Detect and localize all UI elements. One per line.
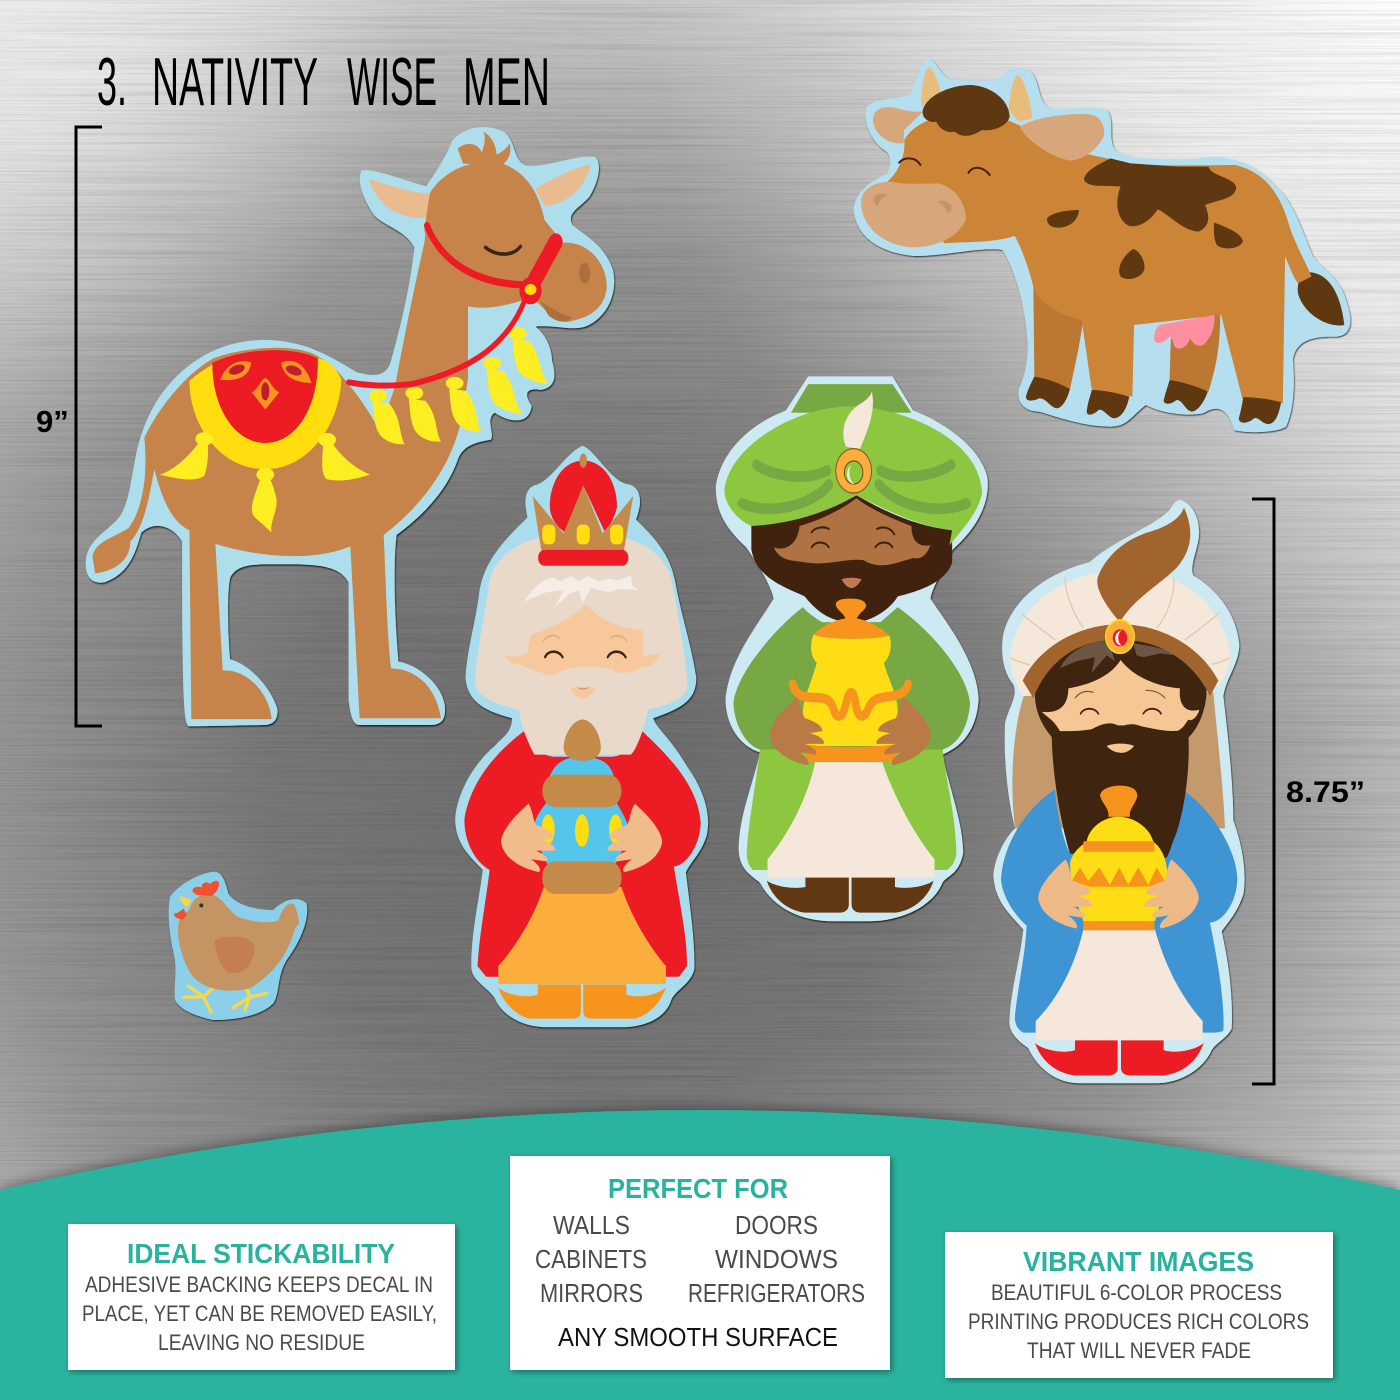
surfaces list: WALLS xyxy=(553,1210,630,1240)
card body text: PLACE, YET CAN BE REMOVED EASILY, xyxy=(82,1301,437,1326)
card heading: PERFECT FOR xyxy=(608,1173,788,1204)
red king hands xyxy=(501,804,662,872)
blue king magnet xyxy=(993,500,1245,1083)
tan head cloth xyxy=(1012,692,1225,828)
red king mouth xyxy=(571,687,596,699)
camel eye xyxy=(485,246,521,254)
teal curved band xyxy=(0,1110,1400,1400)
red robe xyxy=(464,731,701,977)
cow right ear xyxy=(1020,114,1104,161)
golden urn xyxy=(1100,786,1137,817)
blue king face xyxy=(1042,660,1199,731)
turban plume xyxy=(1097,508,1190,622)
title: NATIVITY xyxy=(152,44,318,120)
orange gown xyxy=(498,887,666,984)
card body text: THAT WILL NEVER FADE xyxy=(1027,1338,1251,1363)
blue king hands xyxy=(1038,859,1199,929)
white gown xyxy=(768,762,935,877)
surfaces list: REFRIGERATORS xyxy=(688,1278,865,1308)
camel tassels xyxy=(160,327,548,533)
cream turban xyxy=(1010,570,1231,696)
white hair and beard xyxy=(475,532,688,755)
chicken magnet xyxy=(169,872,307,1020)
green coat xyxy=(747,748,956,870)
golden urn xyxy=(836,599,866,622)
green king mouth xyxy=(842,578,862,588)
title: 3. xyxy=(97,44,127,120)
cow back legs xyxy=(1033,283,1220,392)
cow horns xyxy=(921,67,1032,122)
camel head xyxy=(424,161,607,322)
turban jewel xyxy=(1106,620,1134,653)
cow muzzle xyxy=(861,182,966,247)
chicken beak xyxy=(179,896,192,907)
cow eyes xyxy=(899,158,990,175)
cow sticker backing xyxy=(854,59,1350,432)
green king face xyxy=(774,498,930,565)
green sleeves xyxy=(733,607,970,749)
surface footer: ANY SMOOTH SURFACE xyxy=(558,1322,838,1352)
green king hands xyxy=(770,697,931,765)
card background xyxy=(510,1156,890,1370)
camel height label: 9” xyxy=(36,404,69,439)
red shoes xyxy=(1035,1040,1204,1075)
surfaces list xyxy=(535,1210,865,1308)
card: vibrant images xyxy=(945,1232,1333,1378)
king height label: 8.75” xyxy=(1286,776,1365,809)
cow magnet xyxy=(854,59,1350,432)
green turban xyxy=(724,406,982,545)
camel saddle xyxy=(189,358,341,469)
cow udder xyxy=(1154,315,1215,349)
green king eyes xyxy=(812,527,894,547)
saddle ornaments xyxy=(220,361,312,409)
cow hooves xyxy=(1026,377,1281,424)
surfaces list: MIRRORS xyxy=(540,1278,643,1308)
card heading: VIBRANT IMAGES xyxy=(1023,1246,1254,1277)
black beard xyxy=(1052,723,1189,858)
dark hair xyxy=(1035,640,1207,739)
card body text xyxy=(968,1280,1309,1363)
blue robe xyxy=(1001,790,1237,1033)
surfaces list: DOORS xyxy=(735,1210,818,1240)
camel ears xyxy=(369,164,591,218)
chicken body xyxy=(178,894,299,991)
camel hair tuft xyxy=(458,132,510,166)
card body text: PRINTING PRODUCES RICH COLORS xyxy=(968,1309,1309,1334)
turban band xyxy=(1023,624,1218,698)
turban feather xyxy=(843,391,873,449)
camel sticker backing xyxy=(86,127,614,726)
chicken comb xyxy=(193,881,219,896)
king height bracket xyxy=(1252,499,1274,1084)
crown dome xyxy=(550,461,617,532)
cow hair xyxy=(923,85,1010,136)
chicken wing xyxy=(215,937,254,973)
blue urn xyxy=(534,757,628,868)
chicken sticker backing xyxy=(169,872,307,1020)
card background xyxy=(945,1232,1333,1378)
brown boots xyxy=(767,878,934,913)
white gown xyxy=(1036,930,1203,1040)
chicken wattle xyxy=(174,908,187,919)
card: ideal stickability xyxy=(68,1224,455,1370)
surfaces list: WINDOWS xyxy=(715,1244,838,1274)
camel mouth and nostril xyxy=(541,302,572,322)
chicken feet xyxy=(184,982,267,1012)
camel body xyxy=(93,198,468,719)
red king eyes and brows xyxy=(545,652,626,657)
card body text: BEAUTIFUL 6-COLOR PROCESS xyxy=(991,1280,1282,1305)
card: perfect for xyxy=(510,1156,890,1370)
surfaces list: CABINETS xyxy=(535,1244,647,1274)
orange shoes xyxy=(498,984,666,1019)
gold crown xyxy=(533,485,633,550)
turban jewel xyxy=(836,449,872,493)
red king sticker backing xyxy=(455,446,708,1027)
red king magnet xyxy=(455,446,708,1027)
card body text: LEAVING NO RESIDUE xyxy=(158,1330,365,1355)
card heading: IDEAL STICKABILITY xyxy=(127,1238,395,1269)
card body text: ADHESIVE BACKING KEEPS DECAL IN xyxy=(85,1272,433,1297)
card background xyxy=(68,1224,455,1370)
blue king sticker backing xyxy=(993,500,1245,1083)
card body text xyxy=(82,1272,437,1355)
chicken eye xyxy=(199,903,203,907)
camel height bracket xyxy=(76,127,102,726)
cow spots xyxy=(1047,158,1243,279)
title: MEN xyxy=(463,44,550,120)
camel halter and reins xyxy=(349,226,556,386)
turban back xyxy=(791,384,911,413)
blue king mouth xyxy=(1107,744,1134,753)
green king sticker backing xyxy=(716,376,988,921)
hair highlight xyxy=(524,575,639,607)
red king face xyxy=(505,604,661,676)
green king magnet xyxy=(716,376,988,921)
dark hair and beard xyxy=(751,495,952,622)
title xyxy=(97,44,550,120)
cow body xyxy=(887,113,1312,403)
title: WISE xyxy=(347,44,437,120)
camel magnet xyxy=(86,127,614,726)
cow left ear xyxy=(873,107,923,143)
cow tail tuft xyxy=(1298,272,1344,325)
blue king eyes xyxy=(1081,709,1161,714)
